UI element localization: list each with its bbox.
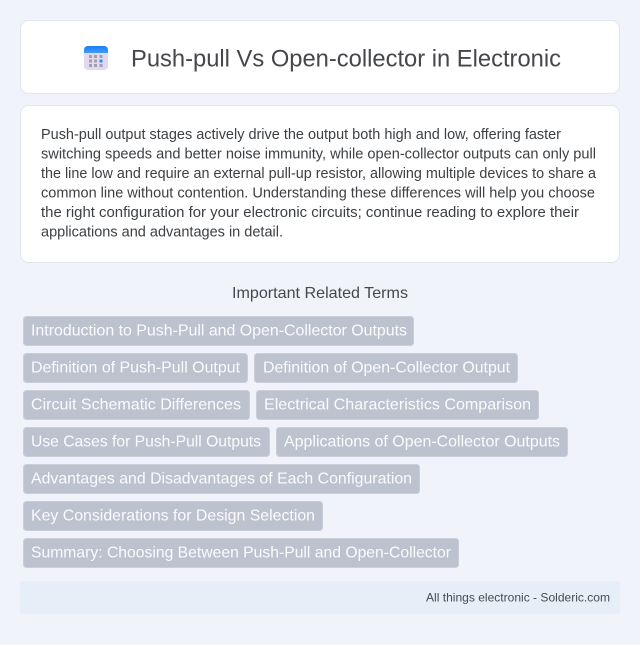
panel: description: Push-pull output stages actively drive the output both high and low, offering faster (41, 127, 561, 143)
panel: description: applications and advantages in detail. (41, 224, 283, 240)
chip: design considerations (24, 502, 322, 530)
panel: description: the line low and require an external pull-up resistor, allowing multiple devices to share a (41, 166, 596, 182)
chip: electrical characteristics: Electrical Characteristics Comparison (264, 396, 531, 414)
chip: open-collector definition: Definition of Open-Collector Output (263, 360, 511, 376)
footer (20, 581, 620, 614)
panel: description: the right configuration for your electronic circuits; continue reading to explore their (41, 205, 579, 221)
chip: introduction: Introduction to Push-Pull and Open-Collector Outputs (31, 322, 407, 340)
chip: introduction (24, 316, 414, 346)
chip: advantages: Advantages and Disadvantages of Each Configuration (31, 470, 412, 488)
icon: calendar (84, 46, 108, 70)
chip: summary (24, 538, 458, 568)
chip: push-pull definition: Definition of Push-Pull Output (31, 360, 241, 376)
panel: description (20, 106, 620, 262)
chip: design considerations: Key Considerations for Design Selection (31, 508, 315, 524)
panel: description: switching speeds and better noise immunity, while open-collector outputs can only pull (41, 146, 596, 162)
chip: open-collector applications (276, 428, 568, 456)
chip: schematic differences: Circuit Schematic Differences (31, 396, 241, 414)
term chips (24, 316, 568, 568)
footer: All things electronic - Solderic.com (426, 590, 610, 604)
chip: schematic differences (24, 390, 250, 420)
chip: push-pull use cases (24, 428, 270, 456)
heading: related terms: Important Related Terms (232, 285, 408, 302)
title: Push-pull Vs Open-collector in Electronic (131, 46, 561, 72)
chip: push-pull use cases: Use Cases for Push-Pull Outputs (31, 434, 261, 450)
chip: open-collector applications: Applications of Open-Collector Outputs (284, 434, 560, 450)
chip: summary: Summary: Choosing Between Push-Pull and Open-Collector (31, 544, 452, 562)
chip: advantages (24, 464, 420, 494)
panel: description: common line without contention. Understanding these differences will help you choose (41, 186, 595, 202)
header panel (20, 20, 620, 94)
chip: electrical characteristics (256, 390, 538, 420)
chip: push-pull definition (24, 354, 248, 382)
chip: open-collector definition (254, 354, 518, 382)
